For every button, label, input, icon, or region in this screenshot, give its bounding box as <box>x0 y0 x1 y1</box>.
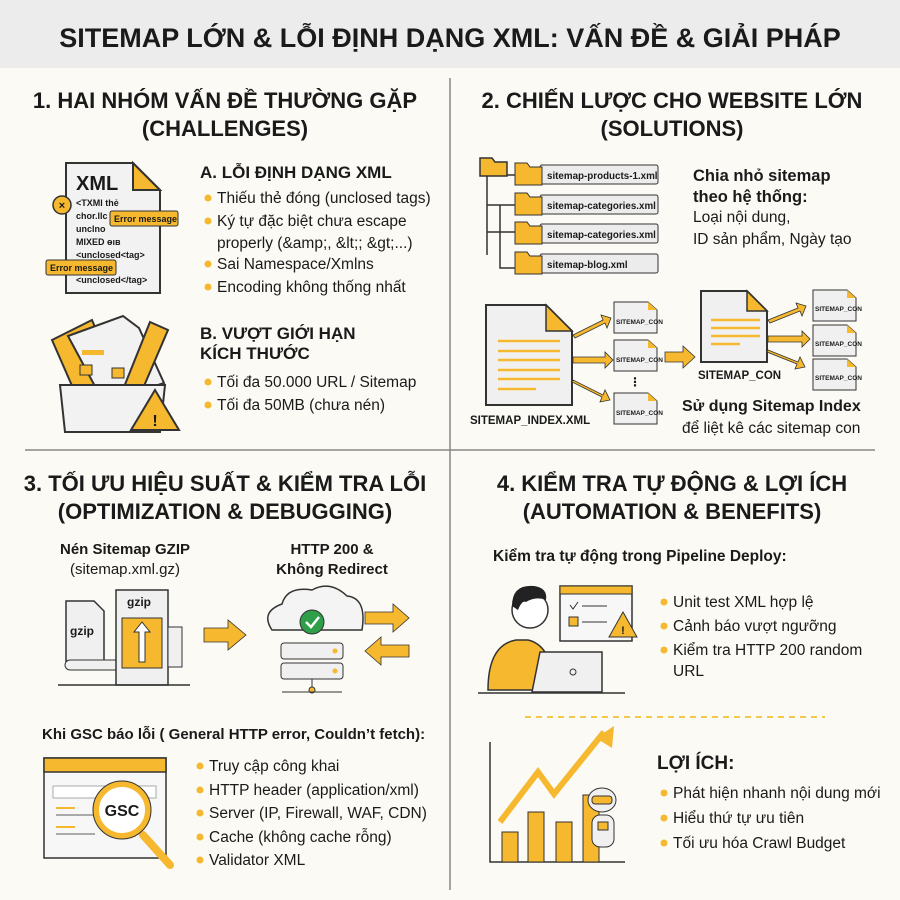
text: gzip: Nén Sitemap GZIP <box>60 541 190 558</box>
title: SITEMAP LỚN & LỖI ĐỊNH DẠNG XML: VẤN ĐỀ & GIẢI PHÁP <box>59 21 841 53</box>
text: benefits: Phát hiện nhanh nội dung mới <box>673 785 881 802</box>
text: A xml errors: Encoding không thống nhất <box>217 279 406 296</box>
text: gzip: (sitemap.xml.gz) <box>70 561 180 578</box>
diagram: sitemap index: SITEMAP_CON <box>698 370 781 382</box>
heading 2: 2. CHIẾN LƯỢC CHO WEBSITE LỚN <box>482 88 862 113</box>
folder tree: sitemap-categories.xml <box>547 201 656 212</box>
icon: folder with ruler and warning: ! <box>152 413 158 430</box>
heading 4: 4. KIỂM TRA TỰ ĐỘNG & LỢI ÍCH <box>497 471 847 496</box>
diagram: sitemap index: SITEMAP_CON <box>815 306 862 313</box>
text: http 200: Không Redirect <box>276 561 388 578</box>
text: A xml errors: Thiếu thẻ đóng (unclosed tags) <box>217 190 431 207</box>
list: gsc checks: Validator XML <box>209 852 306 869</box>
text: benefits: Hiểu thứ tự ưu tiên <box>673 810 804 827</box>
list: pipeline checks: Unit test XML hợp lệ <box>673 594 814 611</box>
panel: solutions <box>470 88 862 437</box>
text: pipeline heading: Kiểm tra tự động trong Pipeline Deploy: <box>493 548 787 565</box>
panel: optimization <box>24 470 427 869</box>
heading 3: (OPTIMIZATION & DEBUGGING) <box>58 499 392 524</box>
icon: gzip machine: gzip <box>70 624 94 638</box>
icon: cloud server <box>268 586 409 693</box>
heading 2 <box>482 88 862 141</box>
text: A xml errors: Sai Namespace/Xmlns <box>217 256 374 273</box>
diagram: sitemap index <box>470 290 862 427</box>
text: B size limits: Tối đa 50MB (chưa nén) <box>217 397 385 414</box>
icon: gzip machine <box>58 590 190 685</box>
diagram: sitemap index: SITEMAP_INDEX.XML <box>470 415 590 427</box>
diagram: sitemap index: SITEMAP_CON <box>815 375 862 382</box>
list: gsc checks <box>196 758 427 869</box>
text: split sitemap <box>693 167 852 248</box>
text: B size limits: B. VƯỢT GIỚI HẠN <box>200 324 356 343</box>
text: split sitemap: ID sản phẩm, Ngày tạo <box>693 231 852 248</box>
list: pipeline checks: URL <box>673 663 704 680</box>
folder tree: sitemap-blog.xml <box>547 260 628 271</box>
icon: person with laptop: ! <box>621 625 625 637</box>
text: A xml errors <box>200 163 431 296</box>
text: A xml errors: Ký tự đặc biệt chưa escape <box>217 213 407 230</box>
text: B size limits: Tối đa 50.000 URL / Sitemap <box>217 374 416 391</box>
icon: xml document with errors: MIXED ɵıʙ <box>76 237 121 247</box>
icon: gzip machine: gzip <box>127 595 151 609</box>
icon: xml document with errors: unclno <box>76 224 106 234</box>
heading 1: (CHALLENGES) <box>142 116 308 141</box>
icon: xml document with errors: Error message <box>114 214 177 224</box>
list: pipeline checks: Kiểm tra HTTP 200 random <box>673 642 862 659</box>
text: benefits: Tối ưu hóa Crawl Budget <box>673 835 846 852</box>
icon: folder with ruler and warning <box>52 316 179 432</box>
icon: xml document with errors: <unclosed</tag> <box>76 275 147 285</box>
icon: xml document with errors: XML <box>76 173 118 195</box>
text: benefits <box>657 752 881 852</box>
diagram: sitemap index: SITEMAP_CON <box>616 410 663 417</box>
folder tree: sitemap-categories.xml <box>547 230 656 241</box>
text: benefits: LỢI ÍCH: <box>657 752 734 774</box>
diagram: sitemap index: SITEMAP_CON <box>616 319 663 326</box>
heading 4 <box>497 471 847 524</box>
panel: challenges <box>33 88 431 432</box>
heading 3 <box>24 470 426 524</box>
text: A xml errors: A. LỖI ĐỊNH DẠNG XML <box>200 163 392 182</box>
text: gzip <box>60 541 190 578</box>
text: gsc error heading: Khi GSC báo lỗi ( General HTTP error, Couldn’t fetch): <box>42 726 425 743</box>
text: A xml errors: properly (&amp;, &lt;; &gt;...) <box>217 235 413 252</box>
arrow <box>204 620 246 650</box>
list: pipeline checks: Cảnh báo vượt ngưỡng <box>673 618 836 635</box>
heading 1: 1. HAI NHÓM VẤN ĐỀ THƯỜNG GẶP <box>33 88 417 113</box>
icon: xml document with errors: <unclosed<tag> <box>76 250 145 260</box>
chart: growth bars with robot <box>490 726 625 862</box>
heading 1 <box>33 88 417 141</box>
list: gsc checks: HTTP header (application/xml) <box>209 782 419 799</box>
title <box>0 0 900 68</box>
icon: gsc magnifier: GSC <box>105 803 140 820</box>
icon: person with laptop <box>478 586 637 693</box>
list: pipeline checks <box>660 594 862 680</box>
text: B size limits <box>200 324 416 414</box>
text: http 200: HTTP 200 & <box>290 541 374 558</box>
diagram: sitemap index: SITEMAP_CON <box>815 341 862 348</box>
list: gsc checks: Truy cập công khai <box>209 758 339 775</box>
text: use sitemap index: Sử dụng Sitemap Index <box>682 398 861 415</box>
icon: xml document with errors: × <box>59 200 65 212</box>
icon: gsc magnifier <box>44 758 170 865</box>
heading 4: (AUTOMATION & BENEFITS) <box>523 499 821 524</box>
list: gsc checks: Server (IP, Firewall, WAF, CDN) <box>209 805 427 822</box>
icon: xml document with errors <box>46 163 178 293</box>
heading 3: 3. TỐI ƯU HIỆU SUẤT & KIỂM TRA LỖI <box>24 470 426 496</box>
panel: automation <box>478 471 881 862</box>
icon: xml document with errors: chor.llc <box>76 211 108 221</box>
text: split sitemap: theo hệ thống: <box>693 188 808 206</box>
text: use sitemap index <box>682 398 861 437</box>
text: split sitemap: Loại nội dung, <box>693 209 790 226</box>
text: http 200 <box>276 541 388 578</box>
icon: xml document with errors: <TXMl thẻ <box>76 198 119 208</box>
text: split sitemap: Chia nhỏ sitemap <box>693 167 831 185</box>
text: use sitemap index: để liệt kê các sitemap con <box>682 420 860 437</box>
icon: xml document with errors: Error message <box>50 263 113 273</box>
diagram: sitemap index: ⋮ <box>629 375 641 389</box>
list: gsc checks: Cache (không cache rỗng) <box>209 829 392 846</box>
folder tree: sitemap-products-1.xml <box>547 171 658 182</box>
folder tree <box>480 158 658 274</box>
heading 2: (SOLUTIONS) <box>600 116 744 141</box>
diagram: sitemap index: SITEMAP_CON <box>616 357 663 364</box>
text: B size limits: KÍCH THƯỚC <box>200 344 310 363</box>
